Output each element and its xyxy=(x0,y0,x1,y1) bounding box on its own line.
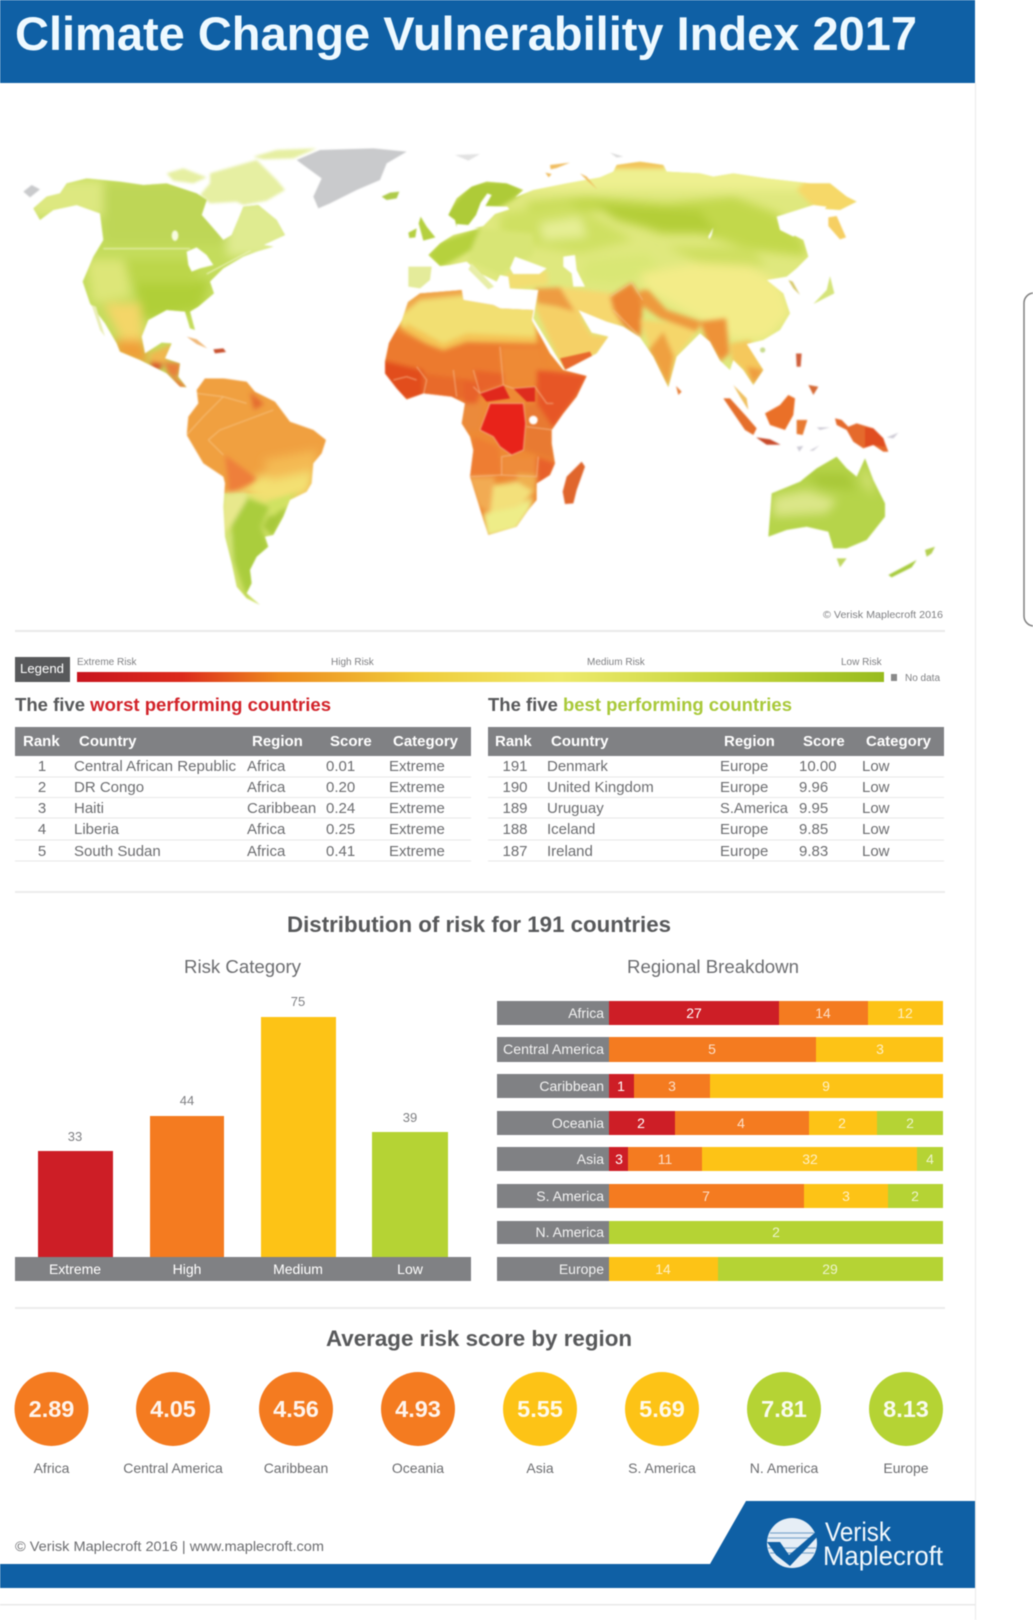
circle: N. America: 7.81 xyxy=(761,1396,807,1422)
subheading: risk category: Risk Category xyxy=(184,957,301,977)
Iberia xyxy=(408,267,432,288)
table: best performing: Score xyxy=(803,733,845,750)
Sumatra xyxy=(723,398,757,435)
Malay peninsula xyxy=(733,385,748,410)
row: Asia: Asia xyxy=(577,1151,604,1167)
table: best performing: Low xyxy=(862,843,890,860)
Sulawesi xyxy=(797,420,807,435)
table: worst performing: Rank xyxy=(23,733,60,750)
circle: S. America: 5.69 xyxy=(639,1396,685,1422)
row: Europe: Europe xyxy=(559,1261,604,1277)
table: best performing: Ireland xyxy=(547,843,593,860)
table: worst performing: Extreme xyxy=(389,800,445,817)
row: Asia: 11 xyxy=(658,1151,672,1167)
row: Oceania: 2 xyxy=(906,1115,914,1131)
row: Europe: 29 xyxy=(822,1261,838,1277)
row: Europe: 14 xyxy=(655,1261,671,1277)
New Guinea xyxy=(835,418,888,452)
table: best performing: Rank xyxy=(495,733,532,750)
map: North America xyxy=(10,148,407,397)
wordmark xyxy=(823,1517,943,1571)
South America xyxy=(183,373,330,607)
row: Africa: 12 xyxy=(897,1005,913,1021)
small islands xyxy=(797,427,898,452)
Haiti xyxy=(213,348,226,353)
category axis xyxy=(15,1257,471,1281)
Arctic islands xyxy=(167,148,317,205)
circle: Central America xyxy=(123,1372,223,1476)
category axis: Low xyxy=(397,1261,424,1277)
table: best performing: 9.96 xyxy=(799,779,828,796)
table: worst performing: South Sudan xyxy=(74,843,161,860)
row: Africa: Africa xyxy=(568,1005,604,1021)
circle: Central America: Central America xyxy=(123,1460,223,1476)
row: Central America: Central America xyxy=(503,1041,604,1057)
row: Caribbean: 9 xyxy=(822,1078,830,1094)
table: best performing: Country xyxy=(551,733,609,750)
table: worst performing: Extreme xyxy=(389,843,445,860)
map: Oceania xyxy=(676,353,935,577)
average risk score circles xyxy=(14,1372,943,1476)
circle: S. America: S. America xyxy=(628,1460,696,1476)
table: best performing: Europe xyxy=(720,843,768,860)
Java xyxy=(756,437,781,445)
table: worst performing: 1 xyxy=(38,758,46,775)
table: worst performing: 4 xyxy=(38,821,46,838)
table: worst performing: Haiti xyxy=(74,800,104,817)
table: best performing: 9.95 xyxy=(799,800,828,817)
row: Oceania: 4 xyxy=(737,1115,745,1131)
table: best performing: Uruguay xyxy=(547,800,604,817)
legend ticks: Low Risk xyxy=(841,657,883,668)
icon: Verisk globe check xyxy=(767,1518,818,1568)
table: worst performing: 2 xyxy=(38,779,46,796)
Arctic Russia xyxy=(545,163,597,189)
legend ticks: High Risk xyxy=(331,657,375,668)
circle: Europe: 8.13 xyxy=(883,1396,929,1422)
table: worst performing: Africa xyxy=(247,821,286,838)
Sakhalin xyxy=(788,280,800,295)
Svalbard xyxy=(455,154,480,161)
row: Central America: 5 xyxy=(708,1041,716,1057)
row: Caribbean: 1 xyxy=(617,1078,625,1094)
table: worst performing: 0.01 xyxy=(326,758,355,775)
row: S. America: S. America xyxy=(536,1188,604,1204)
row: Africa: 27 xyxy=(686,1005,702,1021)
footer credit: © Verisk Maplecroft 2016 | www.maplecroft.com xyxy=(15,1538,324,1554)
bar: high: 44 xyxy=(180,1093,194,1108)
Wrangel grey xyxy=(23,185,40,197)
table: best performing: 9.83 xyxy=(799,843,828,860)
Greenland xyxy=(297,148,407,208)
row: Caribbean xyxy=(497,1074,943,1098)
table: worst performing: Extreme xyxy=(389,821,445,838)
circle: Europe xyxy=(869,1372,943,1476)
circle: Caribbean xyxy=(259,1372,333,1476)
gradient bar xyxy=(77,672,884,682)
row: Oceania: Oceania xyxy=(552,1115,604,1131)
row: S. America xyxy=(497,1184,943,1208)
category axis: Medium xyxy=(273,1261,323,1277)
row: Africa: 14 xyxy=(815,1005,831,1021)
table: best performing: Low xyxy=(862,779,890,796)
bar: low xyxy=(372,1110,448,1257)
Hainan xyxy=(760,347,765,353)
Madagascar xyxy=(563,462,585,504)
Sri Lanka xyxy=(676,386,682,395)
circle: Africa: 2.89 xyxy=(29,1396,74,1422)
row: Oceania: 2 xyxy=(637,1115,645,1131)
row: Caribbean: 3 xyxy=(668,1078,676,1094)
table: best performing: Europe xyxy=(720,821,768,838)
bar: medium xyxy=(261,994,336,1257)
circle: Europe: Europe xyxy=(883,1460,929,1476)
table: worst performing: 3 xyxy=(38,800,46,817)
table: worst performing: Score xyxy=(330,733,372,750)
row: S. America: 7 xyxy=(702,1188,710,1204)
row: Asia: 32 xyxy=(802,1151,818,1167)
circle: Asia xyxy=(503,1372,577,1476)
heading: worst countries: The five worst performing countries xyxy=(15,695,331,715)
table: best performing: Category xyxy=(866,733,932,750)
Britain and Ireland xyxy=(408,217,435,241)
circle: Central America: 4.05 xyxy=(150,1396,196,1422)
table: best performing: 187 xyxy=(502,843,528,860)
Cuba xyxy=(187,337,207,348)
row: S. America: 3 xyxy=(842,1188,850,1204)
Borneo xyxy=(765,395,795,430)
Africa xyxy=(380,287,593,540)
Australia xyxy=(767,455,887,550)
table: best performing xyxy=(488,727,944,861)
heading: distribution: Distribution of risk for 191 countries xyxy=(287,912,671,937)
table: best performing: 191 xyxy=(502,758,528,775)
title: Climate Change Vulnerability Index 2017 xyxy=(15,7,917,60)
table: best performing: Low xyxy=(862,821,890,838)
legend ticks xyxy=(77,657,883,668)
legend label xyxy=(15,657,70,682)
circle: Oceania: 4.93 xyxy=(395,1396,441,1422)
row: Europe xyxy=(497,1257,943,1281)
circle: N. America xyxy=(747,1372,821,1476)
inland seas xyxy=(457,193,827,287)
Philippines xyxy=(796,353,802,367)
circle: Oceania xyxy=(381,1372,455,1476)
table: worst performing: Category xyxy=(393,733,459,750)
bar: high xyxy=(150,1093,224,1257)
Italy xyxy=(468,263,494,289)
table: best performing: United Kingdom xyxy=(547,779,654,796)
row: N. America xyxy=(497,1221,943,1244)
legend ticks: Extreme Risk xyxy=(77,657,137,668)
circle: Asia: 5.55 xyxy=(517,1396,563,1422)
stacked bars: regional breakdown xyxy=(497,1001,943,1281)
bar: low: 39 xyxy=(403,1110,417,1125)
circle: Africa: Africa xyxy=(34,1460,70,1476)
Iceland xyxy=(382,192,399,200)
circle: S. America xyxy=(625,1372,699,1476)
bar: extreme xyxy=(38,1129,113,1257)
no data key: No data xyxy=(905,673,940,684)
logo xyxy=(767,1517,943,1571)
circle: N. America: N. America xyxy=(750,1460,818,1476)
legend xyxy=(15,657,940,684)
row: Central America xyxy=(497,1037,943,1062)
table: best performing: 10.00 xyxy=(799,758,837,775)
table: worst performing: Africa xyxy=(247,843,286,860)
table: worst performing: 0.41 xyxy=(326,843,355,860)
table: worst performing: Central African Republic xyxy=(74,758,236,775)
bar: medium: 75 xyxy=(291,994,305,1009)
table: worst performing: Africa xyxy=(247,779,286,796)
row: N. America: 2 xyxy=(772,1224,780,1240)
row: N. America: N. America xyxy=(536,1224,604,1240)
circle: Caribbean: 4.56 xyxy=(273,1396,319,1422)
table: worst performing: Country xyxy=(79,733,137,750)
table: worst performing xyxy=(15,727,471,861)
table: worst performing: 0.24 xyxy=(326,800,355,817)
map: Eurasia xyxy=(408,153,863,393)
category axis: Extreme xyxy=(49,1261,101,1277)
table: worst performing: 0.25 xyxy=(326,821,355,838)
right page edge xyxy=(974,83,976,1620)
table: best performing: Europe xyxy=(720,758,768,775)
table: best performing: 190 xyxy=(502,779,528,796)
Kamchatka xyxy=(828,216,846,239)
footer band xyxy=(0,1501,975,1588)
row: Oceania: 2 xyxy=(838,1115,846,1131)
table: best performing: Denmark xyxy=(547,758,608,775)
heading: average risk: Average risk score by region xyxy=(326,1326,632,1351)
New Zealand xyxy=(888,560,917,577)
row: Caribbean: Caribbean xyxy=(539,1078,604,1094)
table: best performing: Europe xyxy=(720,779,768,796)
Japan xyxy=(813,276,834,304)
table: best performing: Region xyxy=(724,733,775,750)
circle: Asia: Asia xyxy=(526,1460,554,1476)
row: Oceania xyxy=(497,1111,943,1135)
table: best performing: S.America xyxy=(720,800,789,817)
circle: Caribbean: Caribbean xyxy=(264,1460,328,1476)
table: best performing: 188 xyxy=(502,821,528,838)
side handle outline xyxy=(1024,293,1033,626)
table: best performing: Iceland xyxy=(547,821,595,838)
table: best performing: Low xyxy=(862,758,890,775)
row: Asia: 3 xyxy=(615,1151,623,1167)
legend ticks: Medium Risk xyxy=(587,657,646,668)
table: worst performing: Liberia xyxy=(74,821,120,838)
Tasmania xyxy=(837,558,847,567)
subheading: regional breakdown: Regional Breakdown xyxy=(627,957,799,977)
row: Asia: 4 xyxy=(926,1151,934,1167)
Baja xyxy=(92,305,105,337)
table: best performing: 189 xyxy=(502,800,528,817)
row: Asia xyxy=(497,1147,943,1171)
category axis: High xyxy=(173,1261,201,1277)
circle: Oceania: Oceania xyxy=(392,1460,444,1476)
circle: Africa xyxy=(14,1372,88,1476)
table: worst performing: 0.20 xyxy=(326,779,355,796)
table: worst performing: Extreme xyxy=(389,758,445,775)
table: worst performing: Caribbean xyxy=(247,800,316,817)
map copyright: © Verisk Maplecroft 2016 xyxy=(823,610,943,621)
row: S. America: 2 xyxy=(911,1188,919,1204)
table: worst performing: DR Congo xyxy=(74,779,144,796)
table: worst performing: Region xyxy=(252,733,303,750)
table: worst performing: Extreme xyxy=(389,779,445,796)
wordmark: Maplecroft xyxy=(823,1541,943,1571)
table: best performing: 9.85 xyxy=(799,821,828,838)
table: worst performing: Africa xyxy=(247,758,286,775)
heading: best countries: The five best performing countries xyxy=(488,695,792,715)
table: worst performing: 5 xyxy=(38,843,46,860)
bar chart: risk category xyxy=(15,994,471,1281)
legend label: Legend xyxy=(20,661,64,676)
table: best performing: Low xyxy=(862,800,890,817)
row: Central America: 3 xyxy=(876,1041,884,1057)
header banner xyxy=(0,0,975,83)
row: Africa xyxy=(497,1001,943,1025)
world map xyxy=(10,148,935,607)
wordmark: Verisk xyxy=(825,1517,891,1547)
map: Africa and South America xyxy=(183,287,593,607)
bar: extreme: 33 xyxy=(68,1129,82,1144)
